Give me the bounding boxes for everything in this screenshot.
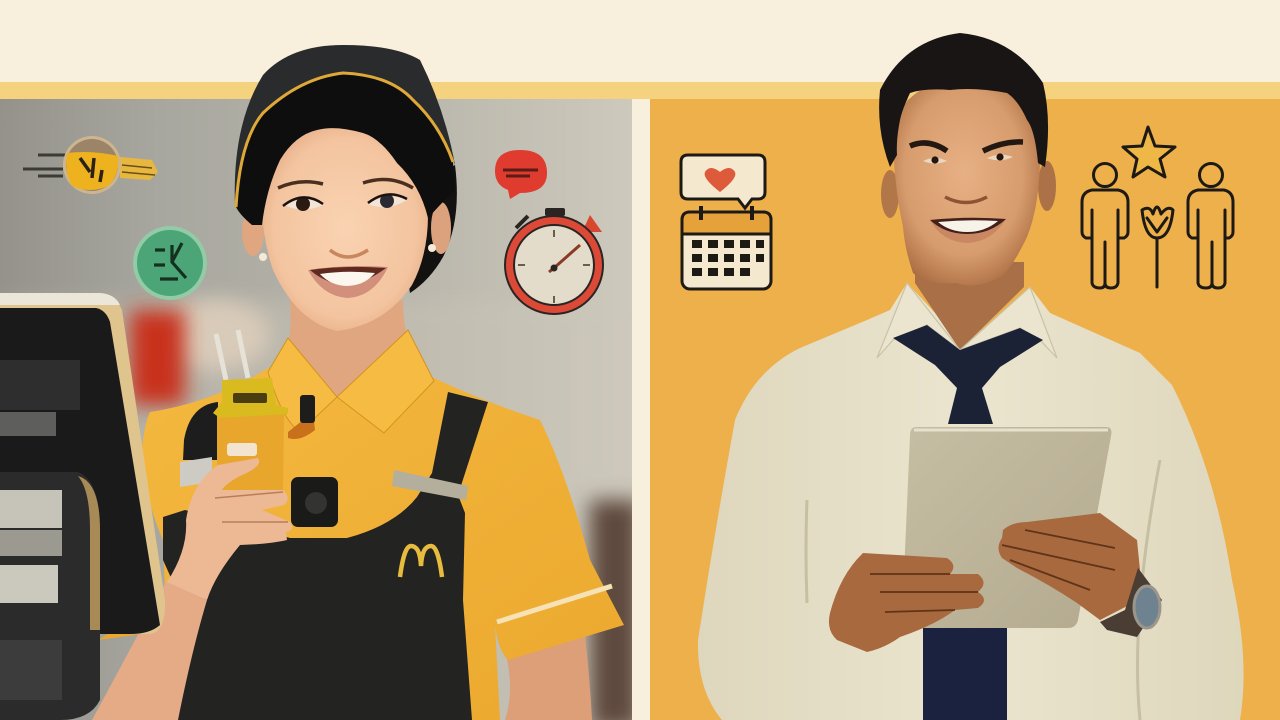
man neck <box>915 262 1024 350</box>
camera <box>291 477 338 527</box>
woman head and hair <box>235 45 457 331</box>
panel: right orange background <box>650 99 1280 720</box>
man head <box>893 80 1040 285</box>
woman left arm <box>92 580 207 720</box>
woman smile <box>308 266 388 298</box>
collar <box>268 330 434 439</box>
icon: stopwatch <box>505 208 603 314</box>
man tie lower <box>923 628 1007 720</box>
woman earrings <box>259 244 436 261</box>
woman shirt <box>142 368 624 720</box>
man shirt <box>698 283 1244 720</box>
woman cap <box>235 45 455 205</box>
cap band <box>236 73 453 207</box>
woman crew member <box>92 45 624 720</box>
woman nose <box>330 250 368 257</box>
wristwatch <box>1100 568 1162 637</box>
man right hand <box>998 513 1140 620</box>
black tool behind cup <box>183 402 218 460</box>
man tie <box>893 325 1043 424</box>
sleeve trim <box>497 586 612 622</box>
man collar <box>877 283 1057 358</box>
cash register <box>0 293 165 720</box>
man smile <box>930 218 1006 243</box>
panel: left restaurant background <box>0 99 640 720</box>
silver clip <box>180 457 212 487</box>
icon: calendar <box>682 206 771 289</box>
cream divider <box>632 99 650 720</box>
man left hand <box>829 553 984 652</box>
icon: green badge <box>133 226 207 300</box>
top cream band <box>0 0 1280 83</box>
straws <box>216 330 248 380</box>
icon: speed coin <box>23 136 158 194</box>
yellow cup <box>213 378 288 490</box>
woman eyes <box>278 179 413 211</box>
woman neck <box>288 300 408 397</box>
icon: team with star and plant <box>1082 127 1233 288</box>
man hair <box>879 33 1048 167</box>
icon: red speech bubble <box>495 150 547 199</box>
woman hand <box>167 458 292 600</box>
collar microphone <box>300 395 315 423</box>
icon: arches logo <box>400 546 442 577</box>
apron <box>163 392 488 720</box>
man manager <box>698 33 1244 720</box>
man ears <box>881 161 1056 218</box>
man brows and eyes <box>910 142 1023 164</box>
woman right arm <box>505 635 592 720</box>
tablet <box>902 427 1111 628</box>
woman hair fringe <box>236 73 455 225</box>
icon: heart speech bubble <box>681 155 765 208</box>
man nose <box>945 197 987 202</box>
name badge <box>392 470 468 500</box>
yellow stripe <box>0 82 1280 99</box>
